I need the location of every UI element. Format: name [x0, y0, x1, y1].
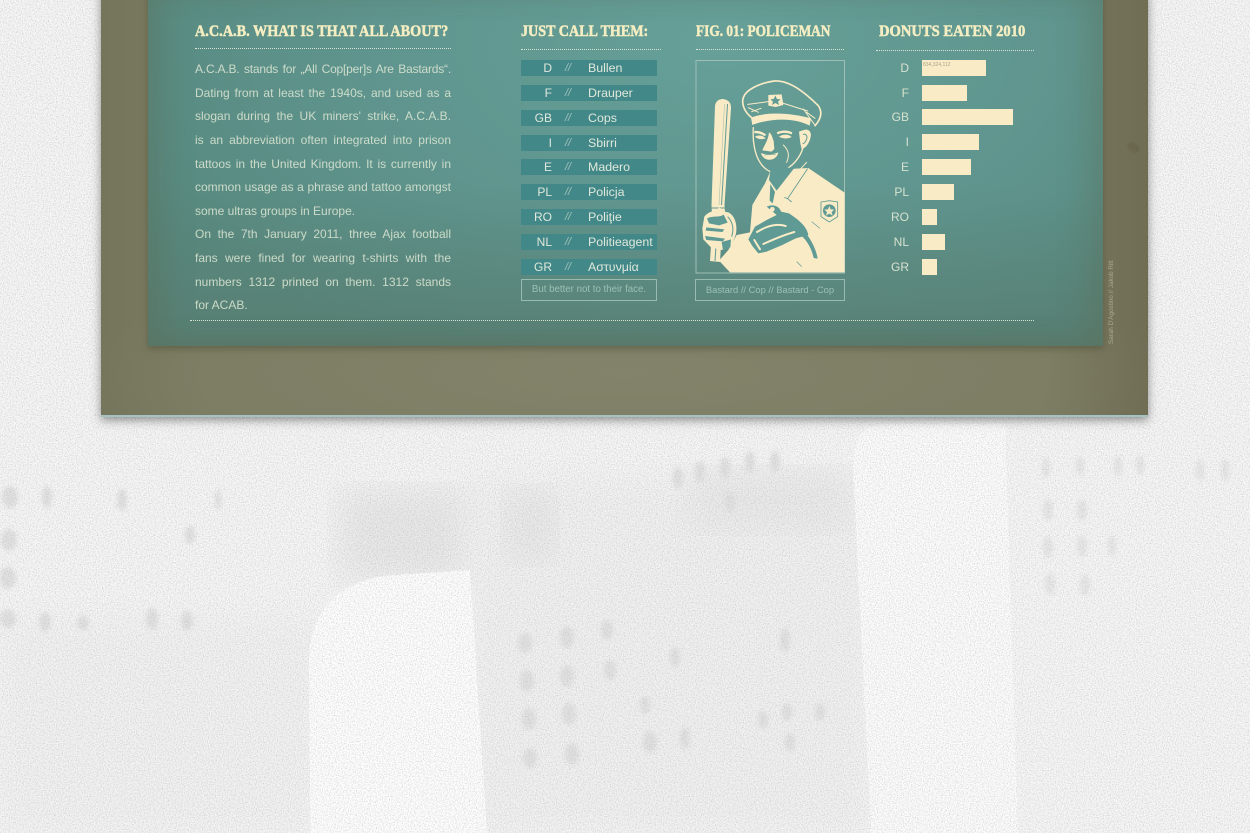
icon: officer head and cap: [743, 81, 821, 175]
icon: baton: [710, 99, 731, 262]
list: translations of cop: Drauper: [588, 86, 633, 100]
list: translations of cop: //: [565, 161, 571, 173]
bar chart: donuts eaten 2010: I: [906, 135, 909, 149]
bar chart: donuts eaten 2010: GR: [891, 260, 909, 274]
heading: donuts eaten: DONUTS EATEN 2010: [879, 23, 1025, 40]
bar chart: donuts eaten 2010: F: [902, 86, 909, 100]
list: translations of cop: PL: [537, 185, 552, 199]
list: translations of cop: F: [545, 86, 552, 100]
list: translations of cop: //: [565, 87, 571, 99]
heading: fig 01: FIG. 01: POLICEMAN: [696, 23, 830, 40]
bar chart: donuts eaten 2010: D: [900, 61, 909, 75]
list: translations of cop: Cops: [588, 111, 617, 125]
list: translations of cop: Madero: [588, 160, 630, 174]
list: translations of cop: E: [544, 160, 552, 174]
caption box: not to their face: [521, 279, 657, 301]
text block: explanation: A.C.A.B. stands for „All Cop[per]s Are Bastards“.: [195, 62, 451, 76]
panel: teal poster body: [148, 0, 1103, 346]
bar chart: donuts eaten 2010: 834,324,112: [923, 62, 950, 68]
list: translations of cop: GR: [534, 260, 552, 274]
text block: explanation: fans were fined for wearing t-shirts with the: [195, 251, 451, 265]
list: translations of cop: RO: [534, 210, 552, 224]
bar chart: donuts eaten 2010: RO: [891, 210, 909, 224]
text block: explanation: is an abbreviation often integrated into prison: [195, 133, 451, 147]
list: translations of cop: D: [543, 61, 552, 75]
list: translations of cop: //: [565, 62, 571, 74]
text block: explanation: slogan during the UK miners' strike, A.C.A.B.: [195, 109, 451, 123]
text block: explanation: tattoos in the United Kingdom. It is currently in: [195, 157, 451, 171]
text block: explanation: On the 7th January 2011, three Ajax football: [195, 227, 451, 241]
list: translations of cop: //: [565, 137, 571, 149]
list: translations of cop: I: [549, 136, 552, 150]
list: translations of cop: //: [565, 112, 571, 124]
list: translations of cop: NL: [537, 235, 552, 249]
list: translations of cop: //: [565, 261, 571, 273]
text block: explanation: some ultras groups in Europe.: [195, 204, 355, 218]
list: translations of cop: Politieagent: [588, 235, 653, 249]
icon: body, hand and pointing fist: [702, 167, 845, 272]
list: translations of cop: //: [565, 236, 571, 248]
heading: just call them: JUST CALL THEM:: [521, 23, 648, 40]
text block: explanation: Dating from at least the 1940s, and used as a: [195, 86, 451, 100]
text block: explanation: for ACAB.: [195, 298, 248, 312]
bar chart: donuts eaten 2010: [891, 60, 1013, 275]
caption box: not to their face: But better not to their face.: [532, 284, 646, 295]
panel: olive poster frame: [101, 0, 1148, 417]
heading: A.C.A.B.: A.C.A.B. WHAT IS THAT ALL ABOUT?: [195, 23, 448, 40]
list: translations of cop: [521, 60, 657, 275]
list: translations of cop: Poliţie: [588, 210, 622, 224]
bar chart: donuts eaten 2010: E: [901, 160, 909, 174]
bar chart: donuts eaten 2010: PL: [894, 185, 909, 199]
text block: explanation: common usage as a phrase and tattoo amongst: [195, 180, 451, 194]
text block: explanation: [195, 62, 452, 312]
caption box: bastard cop: Bastard // Cop // Bastard - Cop: [706, 284, 834, 295]
text block: explanation: numbers 1312 printed on them. 1312 stands: [195, 275, 451, 289]
bar chart: donuts eaten 2010: GB: [892, 110, 909, 124]
bar chart: donuts eaten 2010: NL: [894, 235, 909, 249]
list: translations of cop: Policja: [588, 185, 625, 199]
stain mark on frame: [1126, 140, 1141, 155]
list: translations of cop: GB: [535, 111, 552, 125]
credit: vertical authors: Sarah D'Agostino // Jakob Ritt: [1108, 260, 1115, 344]
figure: policeman illustration: [696, 60, 845, 274]
list: translations of cop: Αστυνμία: [588, 260, 639, 274]
list: translations of cop: //: [565, 211, 571, 223]
list: translations of cop: //: [565, 186, 571, 198]
list: translations of cop: Sbirri: [588, 136, 617, 150]
caption box: bastard cop: [695, 279, 845, 301]
list: translations of cop: Bullen: [588, 61, 622, 75]
